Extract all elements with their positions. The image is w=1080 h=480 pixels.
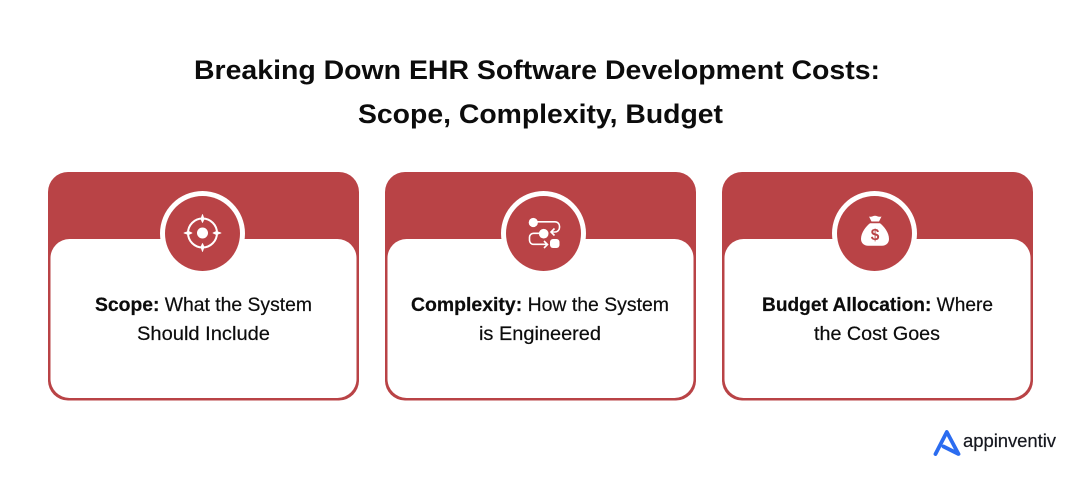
icon: logo arrow (936, 432, 958, 454)
panel: budget allocation (722, 172, 1033, 400)
text: scope label: Scope: What the System (95, 294, 312, 316)
text: budget label: the Cost Goes (814, 323, 940, 345)
title (194, 55, 880, 129)
text: scope label (95, 294, 312, 345)
text: scope label: Should Include (137, 323, 270, 345)
text: complexity label (411, 294, 669, 345)
icon: target (160, 191, 245, 276)
text: budget label (762, 294, 993, 345)
logo: appinventiv: appinventiv (963, 430, 1057, 451)
icon: workflow (501, 191, 586, 276)
text: complexity label: is Engineered (479, 323, 601, 345)
panel: complexity (385, 172, 696, 400)
title: Breaking Down EHR Software Development Costs: (194, 55, 880, 85)
text: complexity label: Complexity: How the System (411, 294, 669, 316)
icon glyph: dollar sign: $ (871, 227, 880, 244)
logo: appinventiv (936, 430, 1057, 454)
text: budget label: Budget Allocation: Where (762, 294, 993, 316)
icon: money bag (832, 191, 917, 276)
title: Scope, Complexity, Budget (358, 99, 723, 129)
panel: scope (48, 172, 359, 400)
